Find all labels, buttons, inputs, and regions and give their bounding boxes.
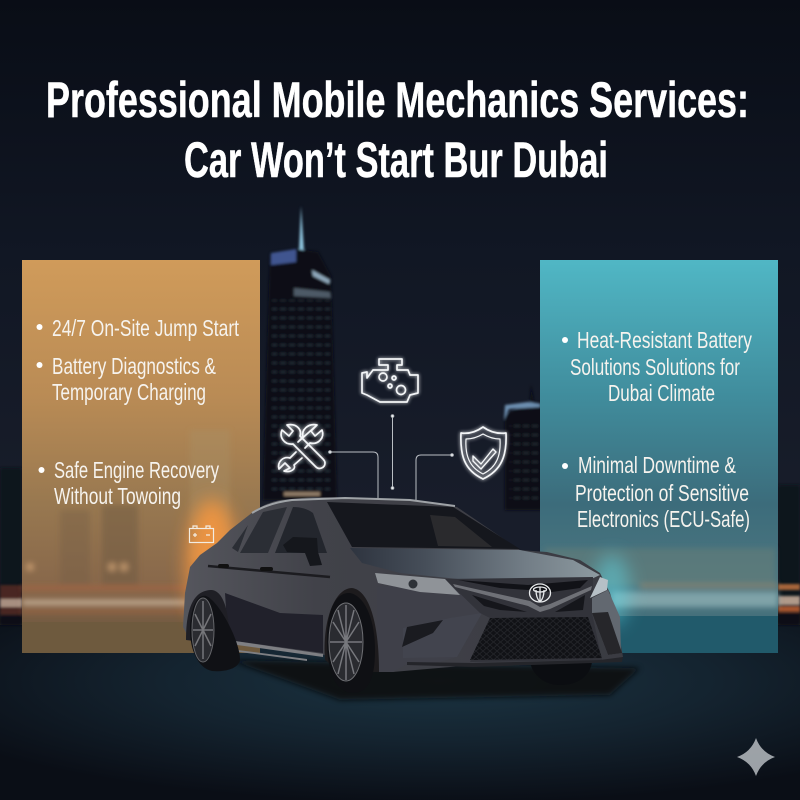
far right buildings: [778, 485, 800, 625]
front bumper: [377, 580, 482, 672]
panel: orange services: [22, 260, 260, 653]
text block: left bullet 2: Temporary Charging: [52, 379, 206, 405]
chrome band: [453, 584, 592, 612]
upper grille slat: [458, 580, 588, 592]
car: [183, 497, 623, 693]
far front wheel: [530, 662, 592, 685]
toyota emblem: [530, 584, 550, 602]
windshield interior: [430, 515, 492, 547]
right side panel: [592, 590, 621, 655]
icon: crossed wrenches: [279, 425, 325, 471]
door belt line: [208, 566, 330, 577]
rear side window: [240, 507, 287, 553]
title: [46, 72, 749, 188]
text block: right bullet 2: [562, 452, 750, 532]
headlight left lens: [408, 580, 418, 588]
mesh left: [472, 595, 527, 612]
text block: left bullet 2: [36, 353, 216, 405]
text block: left bullet 3: Without Towoing: [54, 483, 181, 509]
mesh right: [555, 595, 585, 612]
icon: four-point star watermark: [737, 738, 775, 776]
headlight left: [375, 573, 460, 595]
door handles: [220, 566, 271, 569]
car body: [183, 497, 623, 672]
lower grille: [470, 617, 602, 660]
lower door shadow: [225, 593, 323, 653]
rear quarter window: [232, 525, 248, 552]
front side window: [275, 507, 327, 553]
windshield: [327, 502, 520, 549]
icon: battery: [190, 526, 214, 542]
connector lines: [329, 415, 453, 525]
front wheel: [327, 593, 375, 693]
rocker highlights: [228, 640, 323, 661]
bumper trim: [407, 657, 623, 667]
roof edge highlight: [252, 498, 455, 513]
hood: [350, 548, 600, 581]
text block: left bullet 1: 24/7 On-Site Jump Start: [52, 315, 239, 341]
right tower: [504, 385, 556, 510]
text block: right bullet 2: Protection of Sensitive: [575, 480, 749, 506]
right vent: [592, 612, 622, 655]
car glow: orange: [186, 499, 238, 631]
fog vent: [402, 620, 443, 647]
mirror: [283, 537, 322, 566]
text block: right bullet 2: Minimal Downtime &: [578, 452, 736, 478]
headlight right: [590, 577, 608, 598]
text block: left bullet 3: Safe Engine Recovery: [54, 457, 219, 483]
rear wheel arch: [186, 590, 229, 645]
panel lower road tone: [22, 622, 260, 653]
car shadow: [230, 660, 640, 700]
title: Car Won’t Start Bur Dubai: [184, 132, 608, 188]
background: night sky: [0, 0, 800, 640]
front wheel arch: [325, 588, 379, 672]
icon: engine: [362, 359, 418, 402]
far left buildings: [0, 468, 22, 625]
panel: teal services: [540, 260, 778, 653]
background: road: [0, 625, 800, 800]
left tower with spire: [263, 206, 337, 500]
background: city skyline: [0, 206, 800, 625]
text block: left bullet 3: [38, 457, 219, 509]
panel city reflections: [22, 430, 230, 613]
text block: right bullet 1: Solutions Solutions for: [570, 354, 740, 380]
text block: right bullet 1: [562, 327, 752, 406]
text block: right bullet 1: Dubai Climate: [608, 380, 715, 406]
rear wheel: [190, 596, 240, 671]
panel city reflections: [545, 548, 778, 607]
car glow: teal: [594, 554, 630, 626]
text block: left bullet 2: Battery Diagnostics &: [52, 353, 216, 379]
panel lower road tone: [540, 616, 778, 653]
fog light panel: [403, 613, 482, 658]
background: light trails: [0, 584, 800, 625]
grille frame: [445, 577, 602, 662]
icon: shield with check: [461, 427, 506, 479]
